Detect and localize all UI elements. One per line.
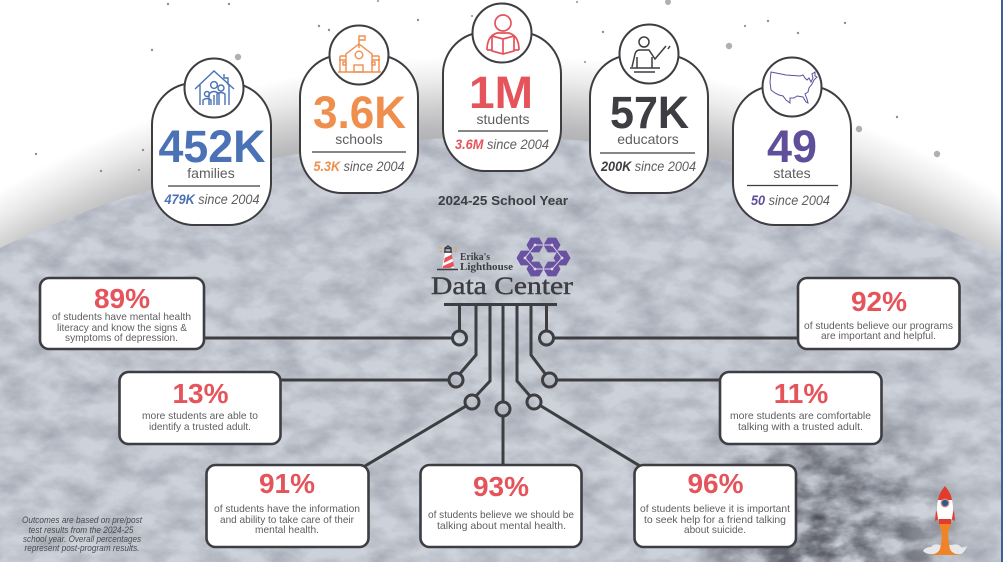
outcome box: 89%: 89% — [94, 283, 150, 314]
outcome box: 11%: talking with a trusted adult. — [738, 421, 863, 433]
outcome box: 93% — [420, 465, 582, 547]
outcome box: 93%: of students believe we should be — [428, 509, 574, 521]
outcome box: 13%: identify a trusted adult. — [149, 421, 251, 433]
stat card: schools — [300, 26, 418, 193]
outcome box: 92%: 92% — [851, 286, 907, 317]
stat card: families — [152, 58, 271, 225]
stat card: students: 1M — [469, 67, 533, 118]
logo: Erika's Lighthouse: Lighthouse — [460, 261, 513, 273]
outcome box: 96%: to seek help for a friend talking — [644, 514, 786, 526]
footnote: represent post-program results. — [24, 543, 140, 554]
right edge stripe — [1001, 0, 1003, 562]
outcome box: 13%: 13% — [172, 378, 229, 409]
outcome box: 96%: 96% — [687, 468, 744, 499]
outcome box: 91%: mental health. — [255, 524, 319, 536]
stat card: educators: educators — [617, 131, 679, 147]
footnote: school year. Overall percentages — [23, 534, 141, 545]
outcome box: 96%: about suicide. — [684, 524, 746, 536]
outcome box: 11% — [720, 372, 882, 444]
stat card: states: 50 since 2004 — [751, 192, 830, 208]
stat card: students: 3.6M since 2004 — [455, 136, 549, 152]
stat card: states: 49 — [767, 121, 817, 172]
footnote: Outcomes are based on pre/post — [22, 515, 142, 526]
logo: Erika's Lighthouse: Erika's — [460, 251, 491, 263]
stat card: schools: 3.6K — [313, 87, 406, 138]
icon: lighthouse — [437, 246, 458, 270]
outcome box: 89%: of students have mental health — [52, 311, 191, 323]
icon: map of the United States — [770, 72, 817, 103]
outcome box: 92%: are important and helpful. — [821, 330, 936, 342]
footnote: test results from the 2024-25 — [28, 525, 134, 536]
logo: purple hexagon ring — [516, 238, 570, 276]
outcome box: 11%: 11% — [774, 378, 828, 409]
outcome box: 11%: more students are comfortable — [730, 410, 871, 422]
heading: school year: 2024-25 School Year — [438, 193, 568, 208]
outcome box: 96%: of students believe it is important — [640, 503, 790, 515]
stat card: students: students — [477, 111, 529, 127]
outcome box: 91%: 91% — [259, 468, 315, 499]
stars — [35, 0, 940, 172]
moon surface — [0, 138, 1001, 562]
logo: Erika's Lighthouse — [437, 246, 513, 273]
outcome box: 96% — [634, 465, 796, 547]
outcome box: 89%: literacy and know the signs & — [57, 322, 187, 334]
stat card: states — [733, 58, 851, 225]
stat card: educators — [590, 24, 708, 193]
stat card: educators: 57K — [610, 87, 689, 138]
icon: rocket — [923, 486, 967, 555]
stat card: schools: schools — [335, 131, 383, 147]
icon: teacher at podium — [630, 37, 670, 72]
outcome box: 13% — [120, 372, 280, 444]
outcome box: 89%: symptoms of depression. — [65, 332, 178, 344]
outcome box: 93%: 93% — [473, 471, 529, 502]
footnote — [22, 515, 142, 554]
outcome box: 89% — [40, 278, 204, 349]
circuit connector diagram — [204, 304, 798, 466]
stat card: families: families — [187, 165, 235, 181]
stat card: families: 452K — [158, 121, 266, 172]
stat card: students — [443, 4, 561, 171]
outcome box: 92%: of students believe our programs — [804, 320, 953, 332]
outcome box: 91%: of students have the information — [214, 503, 360, 515]
outcome box: 91%: and ability to take care of their — [220, 514, 354, 526]
stat card: schools: 5.3K since 2004 — [314, 158, 405, 174]
icon: student reading — [487, 15, 519, 54]
outcome box: 91% — [206, 465, 368, 547]
outcome box: 13%: more students are able to — [142, 410, 258, 422]
heading: Data Center: Data Center — [431, 273, 574, 300]
stat card: states: states — [773, 165, 811, 181]
stat card: families: 479K since 2004 — [164, 191, 260, 207]
stat card: educators: 200K since 2004 — [600, 158, 696, 174]
icon: school building — [338, 36, 381, 72]
outcome box: 92% — [798, 278, 960, 349]
outcome box: 93%: talking about mental health. — [437, 520, 566, 532]
icon: house with family — [195, 71, 234, 105]
